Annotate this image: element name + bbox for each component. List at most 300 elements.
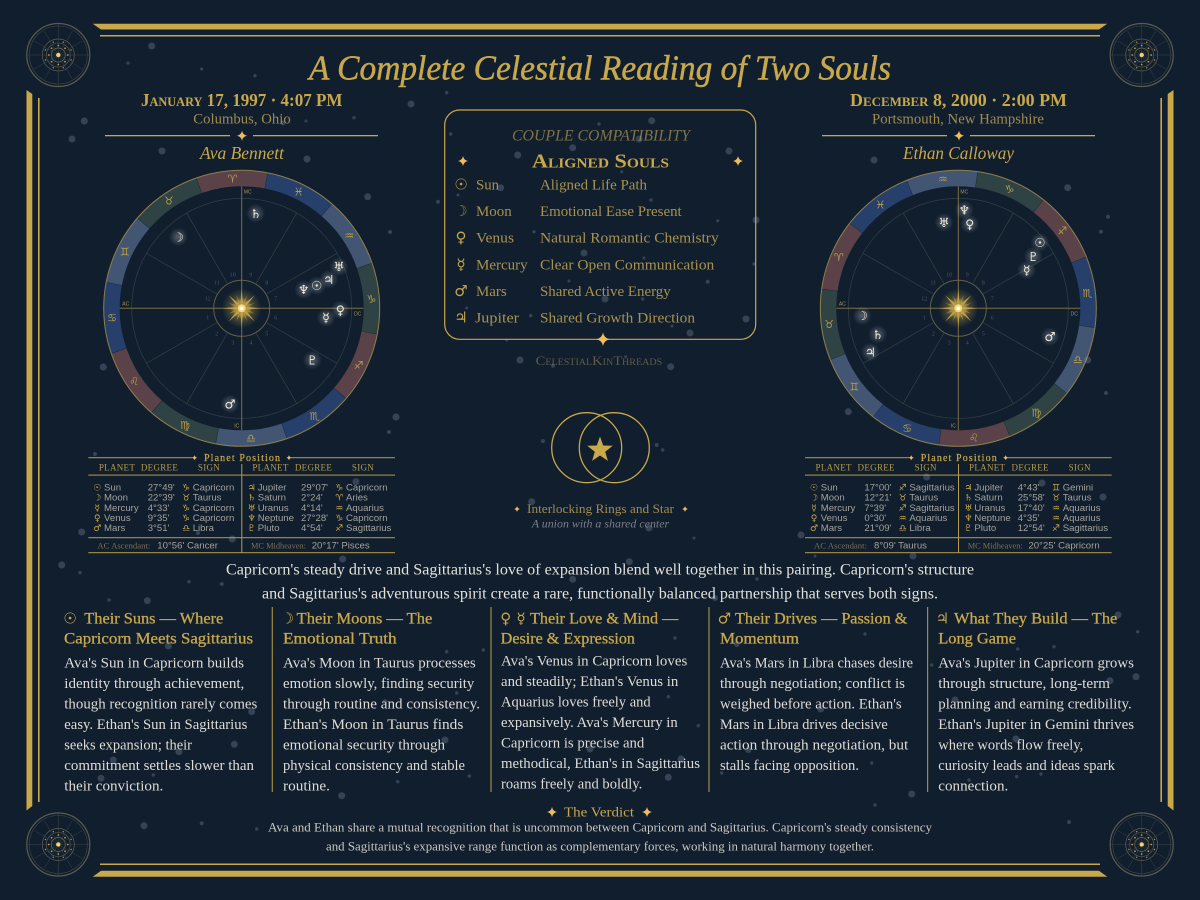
planet rows left: Capricorn xyxy=(193,482,234,494)
planet rows right: ☽ xyxy=(810,494,818,504)
heading: drives: Their Drives — Passion & xyxy=(735,610,908,627)
compatibility rows: ☉ xyxy=(454,175,468,193)
panel: their suns xyxy=(63,609,257,794)
column headers right: PLANET xyxy=(969,462,1006,472)
planet rows right: Aquarius xyxy=(909,513,947,524)
planet rows right: Pluto xyxy=(974,523,996,534)
planet rows right: Sagittarius xyxy=(1063,523,1108,534)
brand name: CelestialKinThreads xyxy=(536,353,662,368)
angles row left: 20°17' Pisces xyxy=(312,540,370,551)
heading: moons: Emotional Truth xyxy=(283,630,397,647)
heading: love and mind: Their Love & Mind — xyxy=(530,610,679,627)
house numbers left: 12 xyxy=(205,296,211,302)
panel: their drives xyxy=(718,609,913,774)
birth date left: January 17, 1997 · 4:07 PM xyxy=(141,90,343,110)
corner medallion: bottom right xyxy=(1110,813,1173,876)
table rules left xyxy=(88,457,395,553)
title: A Complete Celestial Reading of Two Souls xyxy=(307,48,891,88)
compatibility rows: ☿ xyxy=(456,255,466,273)
body: build: through structure, long-term xyxy=(938,676,1110,692)
planet rows right: Mars xyxy=(821,523,842,534)
planet rows left: 9°35' xyxy=(148,513,170,524)
planet rows left: ♀ xyxy=(94,514,101,524)
house numbers left: 9 xyxy=(249,272,252,278)
compatibility rows: Aligned Life Path xyxy=(540,177,647,193)
compatibility rows: Clear Open Communication xyxy=(540,257,715,273)
planet rows left: 29°07' xyxy=(301,482,328,494)
planets left: ☽ xyxy=(173,230,184,244)
planet rows left: Mars xyxy=(104,523,126,534)
divider left xyxy=(105,131,378,141)
planet rows right: 7°39' xyxy=(864,503,886,514)
corner medallion: bottom left xyxy=(27,813,90,876)
body: suns: Ava's Sun in Capricorn builds xyxy=(64,656,244,672)
planets right xyxy=(853,200,1060,362)
compatibility rows: Mercury xyxy=(476,257,528,273)
panel: their moons xyxy=(281,609,480,794)
heading: suns: Capricorn Meets Sagittarius xyxy=(64,630,253,647)
house numbers left: DC xyxy=(354,311,362,317)
planet rows left: 27°28' xyxy=(301,513,328,524)
planet rows right: ♇ xyxy=(964,524,972,534)
body: love and mind xyxy=(501,654,700,792)
zodiac glyphs right: ♑ xyxy=(1004,183,1014,196)
planet rows left: Sun xyxy=(104,482,121,494)
planet rows right: Venus xyxy=(821,513,848,524)
column headers left: PLANET xyxy=(252,462,289,472)
zodiac glyphs left: ♊ xyxy=(120,246,130,258)
planet rows right: ♃ xyxy=(964,484,972,494)
verdict text: Ava and Ethan share a mutual recognition that is uncommon between Capricorn and Sagittarius. Capricorn's steady consistency xyxy=(268,820,932,835)
planet rows left: ♆ xyxy=(248,514,256,524)
planets right: ☿ xyxy=(1023,262,1031,278)
planets left: ☉ xyxy=(311,278,322,293)
planet rows left xyxy=(93,482,392,534)
planet rows left: Aquarius xyxy=(346,503,384,514)
planet rows right: ♂ xyxy=(810,524,818,534)
right person header xyxy=(822,90,1095,163)
planet rows left: ♇ xyxy=(248,524,256,534)
planet rows left: 27°49' xyxy=(148,482,175,494)
heading: build xyxy=(936,609,1117,647)
wheel circles and house lines right xyxy=(820,170,1096,446)
heading: love and mind: ♀ xyxy=(500,609,511,627)
compatibility rows: Jupiter xyxy=(475,310,519,326)
planet rows left: ♑ xyxy=(182,514,190,524)
column dividers xyxy=(272,607,928,792)
heading: moons: Their Moons — The xyxy=(297,610,432,627)
planets right: ♀ xyxy=(965,216,974,232)
house numbers left: 4 xyxy=(249,340,252,346)
planet rows left: Moon xyxy=(104,493,128,504)
body: drives: weighed before action. Ethan's xyxy=(720,697,902,713)
compatibility rows: Shared Active Energy xyxy=(540,284,671,300)
house numbers left: 3 xyxy=(231,340,234,346)
angles row left: AC Ascendant: xyxy=(97,540,150,550)
zodiac glyphs left: ♉ xyxy=(164,195,174,208)
planets right: ♆ xyxy=(959,202,970,218)
heading: drives: ♂ xyxy=(718,609,731,627)
wheel circles and house lines left xyxy=(104,170,380,446)
zodiac glyphs right: ♋ xyxy=(902,422,912,435)
zodiac glyphs left: ♌ xyxy=(129,375,139,388)
planet rows right: ♊ xyxy=(1052,484,1060,494)
planet rows left: Taurus xyxy=(193,493,222,504)
planet rows right: 4°35' xyxy=(1018,513,1040,524)
body: moons: Ava's Moon in Taurus processes xyxy=(283,656,476,672)
planets left: ♇ xyxy=(307,352,318,368)
planet rows right: ♒ xyxy=(899,514,907,524)
heading: build: Long Game xyxy=(938,630,1016,647)
zodiac glyphs left: ♋ xyxy=(107,312,117,324)
body: love and mind: Capricorn is precise and xyxy=(501,735,645,751)
body: love and mind: expansively. Ava's Mercury in xyxy=(501,715,678,731)
planet rows right: Saturn xyxy=(974,493,1003,504)
heading: drives: Momentum xyxy=(720,630,800,647)
planet rows right: ☉ xyxy=(810,484,818,494)
house numbers right: 1 xyxy=(923,315,926,321)
body: build xyxy=(938,656,1134,794)
body: drives xyxy=(720,656,913,774)
house numbers right: 7 xyxy=(991,296,994,302)
planet rows right: 0°30' xyxy=(864,513,886,524)
compatibility rows: Venus xyxy=(476,231,514,247)
table rules right xyxy=(805,457,1112,553)
planet rows right: ♄ xyxy=(964,494,972,504)
planet rows right: ♀ xyxy=(811,514,817,524)
planet rows left: ☽ xyxy=(93,494,101,504)
planet position table: Ethan xyxy=(805,453,1112,553)
zodiac glyphs left: ♒ xyxy=(344,230,354,242)
zodiac glyphs right: ♍ xyxy=(1031,406,1041,419)
body: moons: Ethan's Moon in Taurus finds xyxy=(283,717,463,733)
planet position table: Ava xyxy=(88,453,395,553)
body: moons: emotion slowly, finding security xyxy=(283,676,475,692)
zodiac glyphs left: ♈ xyxy=(228,173,238,186)
zodiac glyphs left: ♐ xyxy=(354,359,364,372)
planet rows right: ♉ xyxy=(1052,494,1060,504)
panel: what they build xyxy=(936,609,1134,794)
house numbers right: DC xyxy=(1071,311,1078,317)
planet rows right: Taurus xyxy=(1063,493,1092,504)
column headers right xyxy=(816,462,1091,472)
body: build: connection. xyxy=(938,778,1008,794)
planet rows right: 12°54' xyxy=(1018,523,1045,534)
planets left: ♄ xyxy=(250,206,261,221)
planet rows right: Libra xyxy=(909,523,931,534)
verdict text: and Sagittarius's expansive range function as complementary forces, working in natural harmony together. xyxy=(326,839,874,854)
compatibility rows: ♃ xyxy=(454,308,468,326)
center sunburst right xyxy=(938,288,978,328)
heading: suns: ☉ xyxy=(63,609,77,627)
house numbers right: 12 xyxy=(921,296,927,302)
house numbers left: 7 xyxy=(274,296,277,302)
planets right: ♄ xyxy=(872,327,883,342)
divider right xyxy=(822,131,1095,141)
person name right: Ethan Calloway xyxy=(902,143,1014,163)
planet rows left: ♒ xyxy=(335,504,343,514)
planet rows right: Mercury xyxy=(821,503,856,514)
zodiac glyphs left: ♓ xyxy=(294,185,303,198)
table title right: Planet Position xyxy=(921,453,997,464)
panel: couple compatibility xyxy=(445,110,756,346)
angles row right: AC Ascendant: xyxy=(814,540,867,550)
body: love and mind: roams freely and boldly. xyxy=(501,776,642,792)
angles row right xyxy=(814,540,1100,551)
body: moons: physical consistency and stable xyxy=(283,758,465,774)
planets right: ♂ xyxy=(1044,329,1056,344)
zodiac glyphs right: ♐ xyxy=(1057,224,1067,237)
heading: build: ♃ xyxy=(936,609,949,627)
body: build: curiosity leads and ideas spark xyxy=(938,758,1115,774)
icon: interlocking rings and star xyxy=(552,413,649,483)
planets left: ♂ xyxy=(224,396,236,412)
planet rows left: ♑ xyxy=(335,484,343,494)
body: build: planning and earning credibility. xyxy=(938,697,1132,713)
planet rows right: ♎ xyxy=(899,524,907,534)
house numbers right: 3 xyxy=(948,340,951,346)
natal chart wheel: Ethan xyxy=(776,126,1141,491)
heading: moons xyxy=(281,609,432,647)
planet rows right: 17°40' xyxy=(1018,503,1045,514)
zodiac glyphs right: ♒ xyxy=(938,173,948,186)
person name left: Ava Bennett xyxy=(199,143,285,163)
sparks right xyxy=(908,455,1008,460)
column headers left: SIGN xyxy=(198,462,220,472)
column headers right: DEGREE xyxy=(858,462,895,472)
planet rows right: 21°09' xyxy=(864,523,892,534)
house numbers right: MC xyxy=(960,189,969,195)
left person header xyxy=(105,90,378,163)
body: build: Ethan's Jupiter in Gemini thrives xyxy=(938,717,1134,733)
planet rows left: ☿ xyxy=(95,504,100,514)
planet rows right: 12°21' xyxy=(864,493,892,504)
heading: love and mind: ☿ xyxy=(516,609,526,627)
panel bottom star xyxy=(596,333,610,346)
zodiac glyphs left: ♍ xyxy=(180,419,190,432)
planets left xyxy=(169,204,350,414)
heading: suns: Their Suns — Where xyxy=(84,610,223,627)
house numbers left: 2 xyxy=(215,331,218,337)
center sunburst left xyxy=(222,288,262,328)
house numbers left: 8 xyxy=(265,280,268,286)
planet rows left: ♑ xyxy=(182,504,190,514)
planet rows left: ♈ xyxy=(335,494,344,504)
planet rows left: 4°33' xyxy=(148,503,170,514)
compatibility rows xyxy=(454,175,719,326)
body: suns: easy. Ethan's Sun in Sagittarius xyxy=(64,717,247,733)
body: build: Ava's Jupiter in Capricorn grows xyxy=(938,656,1134,672)
verdict text xyxy=(268,820,932,854)
heading: love and mind xyxy=(500,609,679,647)
body: moons: emotional security through xyxy=(283,738,445,754)
zodiac glyphs right: ♌ xyxy=(969,431,979,444)
house numbers right: 4 xyxy=(966,340,969,346)
planet rows right: Sagittarius xyxy=(909,482,955,494)
planets left: ♆ xyxy=(298,282,309,297)
symbol caption xyxy=(514,501,688,531)
body: suns xyxy=(64,656,257,794)
planet rows right: Aquarius xyxy=(1063,513,1101,524)
house numbers right: 10 xyxy=(946,272,952,278)
planets right: ♃ xyxy=(865,344,876,360)
intro paragraph: Capricorn's steady drive and Sagittarius's love of expansion blend well together in this pairing. Capricorn's structure xyxy=(226,561,974,578)
planet rows left: ♃ xyxy=(248,484,256,494)
planets left: ♀ xyxy=(336,302,345,318)
zodiac glyphs left: ♏ xyxy=(310,410,320,423)
zodiac glyphs right: ♈ xyxy=(834,251,844,264)
planet rows right: ♐ xyxy=(899,504,907,514)
zodiac glyphs right: ♎ xyxy=(1073,353,1083,366)
zodiac ring left xyxy=(58,125,425,492)
panel: their love and mind xyxy=(500,609,700,792)
column headers left: SIGN xyxy=(352,462,374,472)
heading: drives xyxy=(718,609,908,647)
planet rows left: Neptune xyxy=(258,513,294,524)
compatibility rows: Mars xyxy=(476,284,507,300)
planet rows right: Gemini xyxy=(1063,482,1093,494)
compatibility rows: Shared Growth Direction xyxy=(540,310,695,326)
planet rows left: Capricorn xyxy=(193,513,234,524)
column headers left xyxy=(99,462,374,472)
verdict heading: The Verdict xyxy=(564,806,634,820)
body: love and mind: methodical, Ethan's in Sagittarius xyxy=(501,756,700,772)
house numbers right xyxy=(839,189,1078,429)
planet rows left: ♎ xyxy=(182,524,190,534)
planet rows left: ♑ xyxy=(335,514,343,524)
birth place right: Portsmouth, New Hampshire xyxy=(872,111,1044,127)
column headers left: DEGREE xyxy=(141,462,178,472)
planet rows left: Capricorn xyxy=(346,482,388,494)
planets right: ♇ xyxy=(1028,249,1039,264)
planets left: ♃ xyxy=(323,272,334,287)
planet rows left: Libra xyxy=(193,523,215,534)
body: suns: though recognition rarely comes xyxy=(64,697,257,713)
body: moons: through routine and consistency. xyxy=(283,697,480,713)
angles row left xyxy=(97,540,370,551)
body: love and mind: Ava's Venus in Capricorn loves xyxy=(501,654,687,670)
house numbers left: 5 xyxy=(265,331,268,337)
planet rows left: ♑ xyxy=(182,484,190,494)
panel eyebrow: COUPLE COMPATIBILITY xyxy=(512,128,692,145)
zodiac glyphs right xyxy=(824,173,1092,444)
compatibility rows: Sun xyxy=(476,177,499,193)
planet rows left: Capricorn xyxy=(193,503,234,514)
house numbers left: MC xyxy=(244,189,252,195)
planet rows right: ♆ xyxy=(964,514,972,524)
natal chart wheel: Ava xyxy=(58,125,425,492)
planet rows left: Aries xyxy=(346,493,368,504)
zodiac ring right xyxy=(776,126,1141,491)
planet rows left: ♉ xyxy=(182,494,190,504)
zodiac glyphs right: ♓ xyxy=(875,198,885,211)
house numbers left: 10 xyxy=(230,272,236,278)
column headers right: PLANET xyxy=(816,462,852,472)
planet rows right: ☿ xyxy=(811,504,817,514)
body: suns: their conviction. xyxy=(64,778,163,794)
house numbers left: IC xyxy=(234,423,240,429)
house numbers right: 9 xyxy=(966,272,969,278)
house numbers right: 5 xyxy=(982,331,985,337)
planet rows right xyxy=(810,482,1108,534)
angles row left: MC Midheaven: xyxy=(251,540,306,550)
zodiac glyphs left xyxy=(107,173,376,445)
compatibility rows: Natural Romantic Chemistry xyxy=(540,231,719,247)
planet rows left: Saturn xyxy=(258,493,286,504)
the verdict xyxy=(268,806,932,854)
body: love and mind: and steadily; Ethan's Venus in xyxy=(501,674,679,690)
planet rows left: Capricorn xyxy=(346,513,388,524)
planet rows right: Sun xyxy=(821,482,838,494)
body: drives: Mars in Libra drives decisive xyxy=(720,717,888,733)
house numbers left: 1 xyxy=(206,315,209,321)
planets right: ☽ xyxy=(857,308,868,323)
planet rows right: Sagittarius xyxy=(909,503,955,514)
planet rows left: ♅ xyxy=(248,504,256,514)
planet rows left: ☉ xyxy=(93,484,101,494)
body: drives: action through negotiation, but xyxy=(720,738,909,754)
planet rows right: ♒ xyxy=(1052,514,1060,524)
body: drives: Ava's Mars in Libra chases desire xyxy=(720,656,913,672)
planet rows right: ♒ xyxy=(1052,504,1060,514)
column headers left: PLANET xyxy=(99,462,135,472)
column headers left: DEGREE xyxy=(295,462,332,472)
zodiac glyphs right: ♊ xyxy=(849,380,859,393)
angles row left: 10°56' Cancer xyxy=(157,540,219,551)
panel heading: Aligned Souls xyxy=(532,151,669,173)
verdict sparks xyxy=(547,807,652,817)
symbol caption: Interlocking Rings and Star xyxy=(527,501,675,516)
planet rows right: Uranus xyxy=(974,503,1006,514)
heading: love and mind: Desire & Expression xyxy=(501,630,635,647)
compatibility rows: ☽ xyxy=(454,202,468,220)
zodiac glyphs right: ♉ xyxy=(824,318,834,331)
planets right: ☉ xyxy=(1034,235,1046,250)
house numbers left xyxy=(122,189,362,429)
heading: moons: ☽ xyxy=(281,609,294,627)
body: drives: stalls facing opposition. xyxy=(720,758,859,774)
body: suns: commitment settles slower than xyxy=(64,758,254,774)
column headers right: DEGREE xyxy=(1012,462,1049,472)
planet rows right: ♅ xyxy=(964,504,972,514)
planet rows left: Mercury xyxy=(104,503,139,514)
planet rows right: ♐ xyxy=(899,484,907,494)
compatibility rows: ♀ xyxy=(456,229,466,247)
house numbers right: 11 xyxy=(930,280,936,286)
planet rows left: Venus xyxy=(104,513,131,524)
planet rows left: Pluto xyxy=(258,523,280,534)
heading: build: What They Build — The xyxy=(954,610,1117,627)
corner medallion: top left xyxy=(27,24,90,86)
house numbers left: 11 xyxy=(214,280,220,286)
planets left: ☿ xyxy=(322,310,330,325)
symbol caption: A union with a shared center xyxy=(531,517,670,531)
planet rows right: Taurus xyxy=(909,493,938,504)
house numbers left: 6 xyxy=(274,315,277,321)
intro paragraph: and Sagittarius's adventurous spirit create a rare, functionally balanced partnership that serves both signs. xyxy=(262,585,938,602)
planet rows right: Aquarius xyxy=(1063,503,1101,514)
planets right: ♅ xyxy=(938,215,950,230)
birth place left: Columbus, Ohio xyxy=(193,111,291,127)
body: moons: routine. xyxy=(283,778,330,794)
intro paragraph xyxy=(226,561,974,602)
compatibility rows: ♂ xyxy=(454,282,468,300)
planet rows left: ♂ xyxy=(93,524,101,534)
column headers right: SIGN xyxy=(1069,462,1091,472)
house numbers left: AC xyxy=(122,301,130,307)
birth date right: December 8, 2000 · 2:00 PM xyxy=(850,90,1067,110)
planets left: ♅ xyxy=(333,259,345,274)
